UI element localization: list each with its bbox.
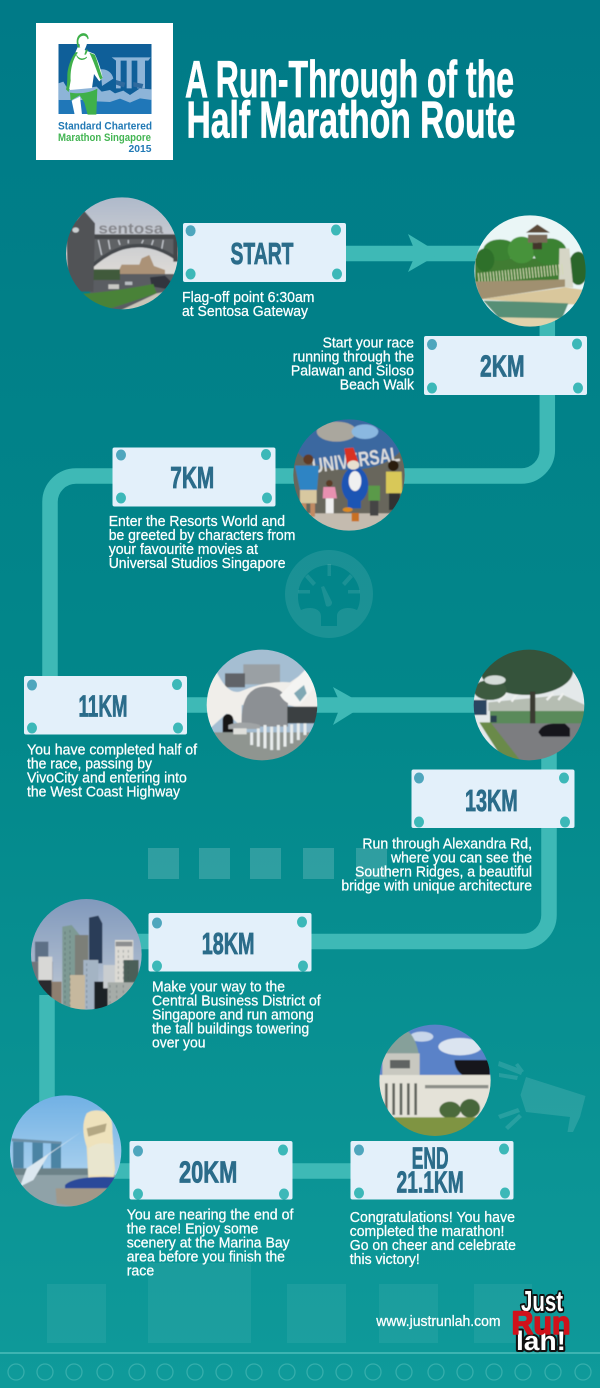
logo: Standard Chartered Marathon Singapore 2015 bbox=[36, 23, 173, 160]
card: START: START bbox=[230, 236, 294, 271]
logo: Just Run Lah bbox=[512, 1286, 570, 1356]
text: 2km description: Start your race bbox=[323, 336, 414, 352]
text: 2km description: running through the bbox=[293, 350, 414, 366]
text: 20km description: race bbox=[127, 1263, 154, 1279]
logo: Standard Chartered Marathon Singapore 2015: 2015 bbox=[128, 143, 152, 155]
text: 20km description bbox=[127, 1207, 294, 1279]
text: 13km description: where you can see the bbox=[390, 851, 532, 867]
card: 2KM: 2KM bbox=[480, 349, 524, 384]
text: 11km description bbox=[27, 743, 198, 801]
photo: Sentosa Gateway: sentosa bbox=[98, 221, 164, 237]
card: 7KM bbox=[112, 448, 276, 506]
logo: Just Run Lah: Run bbox=[512, 1305, 570, 1341]
text: 13km description: Southern Ridges, a beautiful bbox=[355, 865, 532, 881]
card: 2KM bbox=[424, 336, 587, 395]
card: 20KM bbox=[130, 1141, 292, 1200]
text: end description: Congratulations! You have bbox=[350, 1210, 515, 1226]
text: 11km description: the West Coast Highway bbox=[27, 785, 181, 801]
photo: Central Business District skyline bbox=[30, 897, 143, 1013]
card: END 21.1KM: END bbox=[412, 1140, 448, 1176]
text: 18km description: over you bbox=[152, 1035, 206, 1051]
card: 20KM: 20KM bbox=[179, 1154, 237, 1189]
icon: speedometer bbox=[285, 550, 373, 638]
photo: Padang and former Supreme Court bbox=[378, 1023, 493, 1141]
text: 11km description: VivoCity and entering into bbox=[27, 771, 187, 787]
text: end description: this victory! bbox=[350, 1252, 420, 1268]
card: 11KM: 11KM bbox=[78, 689, 128, 724]
photo: Universal Studios bbox=[293, 419, 405, 531]
text: 18km description: Singapore and run among bbox=[152, 1007, 314, 1023]
text: 13km description: Run through Alexandra Rd, bbox=[362, 837, 532, 853]
text: 11km description: the race, passing by bbox=[27, 757, 153, 773]
card: START bbox=[183, 223, 346, 282]
text: 18km description bbox=[152, 979, 322, 1051]
arrow: start to 2km bbox=[408, 234, 440, 272]
logo: Just Run Lah: Just bbox=[521, 1286, 563, 1318]
card: 13KM: 13KM bbox=[465, 783, 518, 818]
text: 20km description: scenery at the Marina Bay bbox=[127, 1235, 290, 1251]
card: 7KM: 7KM bbox=[170, 460, 214, 495]
photo: Southern Ridges, Alexandra Road bbox=[474, 650, 584, 760]
text: 7km description: your favourite movies at bbox=[109, 542, 258, 558]
card: 18KM bbox=[148, 913, 312, 972]
footer line and circles bbox=[0, 1352, 600, 1380]
decorative squares row bbox=[148, 848, 387, 879]
text: 18km description: the tall buildings towering bbox=[152, 1021, 309, 1037]
logo: Standard Chartered Marathon Singapore 2015: Marathon Singapore bbox=[58, 132, 151, 144]
icon: megaphone bbox=[498, 1061, 586, 1132]
website url: www.justrunlah.com bbox=[375, 1314, 501, 1330]
text: 7km description bbox=[109, 514, 295, 572]
photo: Palawan and Siloso Beach Walk bbox=[473, 213, 588, 330]
card: 18KM: 18KM bbox=[202, 926, 254, 961]
text: start description: Flag-off point 6:30am bbox=[182, 290, 314, 306]
card: 13KM bbox=[412, 770, 574, 828]
card: END 21.1KM: 21.1KM bbox=[396, 1165, 464, 1200]
text: 20km description: You are nearing the end of bbox=[127, 1207, 294, 1223]
text: start description: at Sentosa Gateway bbox=[182, 304, 309, 320]
text: 11km description: You have completed half of bbox=[27, 743, 198, 759]
text: 13km description bbox=[341, 837, 532, 895]
photo: Universal Studios: UNIVERSAL bbox=[311, 443, 401, 478]
arrow: 11km to 13km bbox=[333, 687, 365, 725]
photo: VivoCity bbox=[205, 648, 320, 766]
text: start description bbox=[182, 290, 314, 320]
logo: Standard Chartered Marathon Singapore 2015: Standard Chartered bbox=[58, 120, 152, 132]
text: end description: completed the marathon! bbox=[350, 1224, 504, 1240]
title bbox=[185, 51, 516, 150]
text: 2km description: Palawan and Siloso bbox=[291, 364, 414, 380]
text: 7km description: Enter the Resorts World and bbox=[109, 514, 285, 530]
route line bbox=[47, 254, 549, 1171]
card: END 21.1KM bbox=[350, 1140, 514, 1200]
text: end description bbox=[350, 1210, 516, 1268]
logo: Just Run Lah: lah! bbox=[516, 1326, 566, 1356]
text: 2km description bbox=[291, 336, 415, 394]
text: 2km description: Beach Walk bbox=[340, 378, 415, 394]
photo: Sentosa Gateway bbox=[66, 197, 178, 310]
text: end description: Go on cheer and celebrate bbox=[350, 1238, 516, 1254]
card: 11KM bbox=[24, 676, 187, 734]
text: 20km description: the race! Enjoy some bbox=[127, 1221, 258, 1237]
decorative skyline blocks bbox=[47, 1263, 532, 1343]
text: 20km description: area before you finish the bbox=[127, 1249, 285, 1265]
text: 7km description: Universal Studios Singapore bbox=[109, 556, 286, 572]
text: 18km description: Central Business District of bbox=[152, 993, 322, 1009]
photo: Merlion and Marina Bay bbox=[8, 1093, 123, 1210]
text: 13km description: bridge with unique architecture bbox=[341, 879, 532, 895]
text: 7km description: be greeted by characters from bbox=[109, 528, 295, 544]
text: 18km description: Make your way to the bbox=[152, 979, 285, 995]
